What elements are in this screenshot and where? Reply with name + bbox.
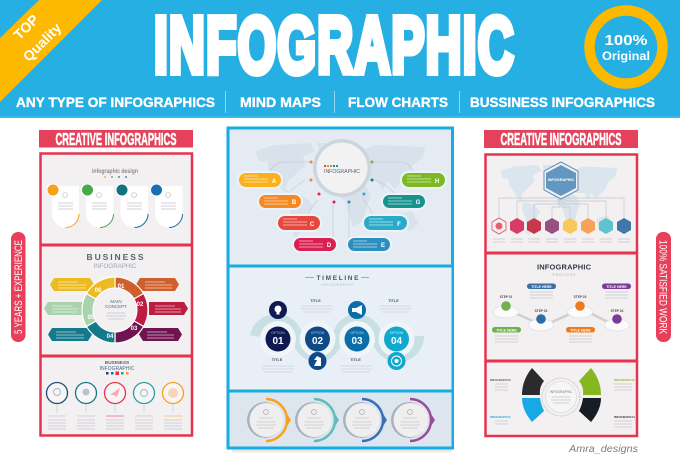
badge: 100% original: Original — [602, 49, 650, 63]
timeline titles: TITLE — [272, 358, 283, 362]
panel: infographic hub — [237, 139, 447, 253]
ribbon: top quality: Quality — [20, 19, 65, 64]
wheel numbers: 03 — [131, 326, 138, 332]
panel: business infographic wheel: INFOGRAPHIC — [94, 263, 137, 270]
credit: Amra_designs — [568, 443, 639, 455]
circle 1 — [46, 382, 68, 429]
main concept: CONCEPT — [105, 304, 127, 309]
side badge: experience — [11, 232, 26, 342]
step labels: STEP 01 — [500, 295, 513, 299]
panel: business infographic wheel: BUSINESS — [86, 252, 144, 262]
option 3 — [339, 321, 375, 357]
center column — [228, 128, 453, 452]
segment blue — [522, 398, 544, 422]
option 2: OPTION — [311, 331, 325, 335]
card 1 — [47, 184, 79, 228]
wheel numbers — [88, 284, 144, 340]
tagline row: ANY TYPE OF INFOGRAPHICS — [16, 94, 215, 110]
side badge: satisfied work: 100% SATISFIED WORK — [656, 240, 668, 334]
step labels — [500, 295, 624, 313]
segment labels: INFOGRAPH 02 — [490, 378, 511, 382]
panel: business infographic circles: INFOGRAPHIC — [100, 366, 135, 372]
panel: process steps: INFOGRAPHIC — [537, 262, 592, 272]
tagline row: BUSSINESS INFOGRAPHICS — [470, 94, 655, 110]
panel: timeline — [230, 268, 452, 390]
title: INFOGRAPHIC — [154, 2, 515, 91]
ribbon: top quality — [0, 0, 102, 102]
connectors — [499, 196, 624, 218]
side badge: satisfied work — [656, 232, 671, 342]
option 1 — [260, 321, 296, 357]
concept wheel — [82, 277, 148, 343]
panel: infographic design — [47, 168, 182, 228]
pill F: F — [397, 222, 401, 228]
segment black — [522, 368, 544, 395]
circle 3 — [104, 382, 126, 429]
icon: bulb — [269, 301, 287, 319]
panel: business infographic wheel — [44, 252, 188, 343]
center frame — [228, 128, 452, 448]
panel: business infographic circles — [46, 360, 184, 429]
pill F — [362, 214, 409, 232]
wheel numbers: 01 — [118, 284, 125, 290]
tagline row: FLOW CHARTS — [348, 94, 448, 110]
panel: programme hierarchy — [492, 162, 631, 242]
pill A: A — [272, 179, 277, 185]
circle 4 — [134, 382, 154, 429]
pill B — [257, 193, 303, 210]
icon: target — [388, 352, 406, 370]
option 4: 04 — [391, 336, 402, 347]
panel frame left — [40, 154, 192, 436]
option 1: OPTION — [271, 331, 285, 335]
option 2: 02 — [312, 336, 323, 347]
panel: business infographic circles: BUSINESS — [105, 360, 130, 366]
pill H: H — [435, 179, 439, 185]
step discs — [494, 301, 630, 331]
title pills: TITLE HERE — [531, 285, 552, 289]
step labels: STEP 04 — [611, 309, 624, 313]
step circle orange — [247, 399, 291, 441]
heading: creative infographics left: CREATIVE INFOGRAPHICS — [56, 129, 176, 149]
right column — [484, 129, 638, 436]
circle 2 — [76, 382, 96, 429]
segment green — [579, 368, 601, 395]
main concept: MAIN — [110, 299, 122, 304]
step labels: STEP 02 — [535, 309, 548, 313]
option 2 — [300, 321, 336, 357]
panel: process steps — [492, 262, 631, 342]
timeline titles: TITLE — [388, 299, 399, 303]
wheel numbers: 05 — [88, 315, 95, 321]
panel: timeline: TIMELINE — [316, 275, 359, 282]
option 4: OPTION — [390, 331, 404, 335]
wheel numbers: 04 — [107, 334, 114, 340]
pill D: D — [327, 243, 332, 249]
option 4 — [378, 321, 414, 357]
pill C — [276, 214, 322, 232]
title pills: TITLE HERE — [496, 328, 517, 332]
segment labels: INFOGRAPH 03 — [614, 378, 635, 382]
option 1: 01 — [272, 336, 284, 347]
center disc: INFOGRAPHIC — [550, 390, 573, 394]
pill A — [237, 171, 283, 189]
panel: four circles — [230, 392, 452, 446]
wheel numbers: 06 — [95, 288, 102, 294]
segment labels: INFOGRAPH 04 — [614, 415, 635, 419]
pill E: E — [381, 243, 385, 249]
badge: 100% original: 100% — [604, 32, 648, 49]
pill H — [400, 171, 447, 189]
small hexagons — [492, 218, 631, 234]
circle 5 — [162, 382, 184, 429]
header banner — [0, 0, 680, 118]
left column — [39, 129, 193, 436]
title pills: TITLE HERE — [606, 285, 627, 289]
pill B: B — [292, 200, 297, 206]
world map — [255, 143, 425, 238]
central hexagon: INFOGRAPHIC — [548, 178, 575, 182]
icon: megaphone — [348, 301, 366, 319]
hub dots — [310, 160, 374, 204]
icon: chess knight — [308, 352, 326, 370]
card 4 — [150, 184, 182, 228]
option 3: 03 — [351, 336, 363, 347]
timeline titles — [272, 299, 399, 362]
timeline wave — [255, 319, 419, 357]
heading: creative infographics left — [39, 129, 193, 149]
pill C: C — [310, 222, 315, 228]
arrow labels — [44, 278, 188, 341]
hub circle: INFOGRAPHIC — [324, 169, 360, 175]
center disc — [542, 378, 580, 416]
hub circle — [313, 139, 371, 197]
segment labels — [490, 378, 635, 419]
panel frame right — [486, 154, 637, 436]
panel: process steps: PROCESS — [552, 272, 576, 277]
option 3: OPTION — [350, 331, 364, 335]
panel: timeline: INFOGRAPHIC — [322, 283, 354, 287]
panel: infographic design: infographic design — [92, 168, 138, 175]
timeline titles: TITLE — [350, 358, 361, 362]
main concept — [105, 299, 127, 319]
pill E — [346, 236, 392, 253]
step circle blue — [343, 399, 387, 441]
world map — [500, 165, 617, 235]
card 3 — [116, 184, 148, 228]
tagline row: MIND MAPS — [240, 94, 321, 110]
pill D — [292, 236, 338, 253]
tagline row — [16, 91, 655, 113]
step circle teal — [295, 399, 339, 441]
side badge: experience: 5 YEARS + EXPERIENCE — [13, 240, 25, 334]
ribbon: top quality: TOP — [10, 11, 42, 43]
card 2 — [82, 184, 114, 228]
timeline titles: TITLE — [310, 299, 321, 303]
panel: four segment circle — [490, 368, 635, 427]
pill G: G — [416, 200, 421, 206]
title pills: TITLE HERE — [570, 328, 591, 332]
wheel numbers: 02 — [137, 302, 144, 308]
segment dark — [579, 398, 601, 422]
step circle purple — [391, 399, 435, 441]
title pills — [492, 284, 631, 332]
segment labels: INFOGRAPH 01 — [490, 415, 511, 419]
pill G — [381, 193, 427, 210]
badge: 100% original — [590, 10, 662, 84]
step labels: STEP 03 — [574, 295, 587, 299]
